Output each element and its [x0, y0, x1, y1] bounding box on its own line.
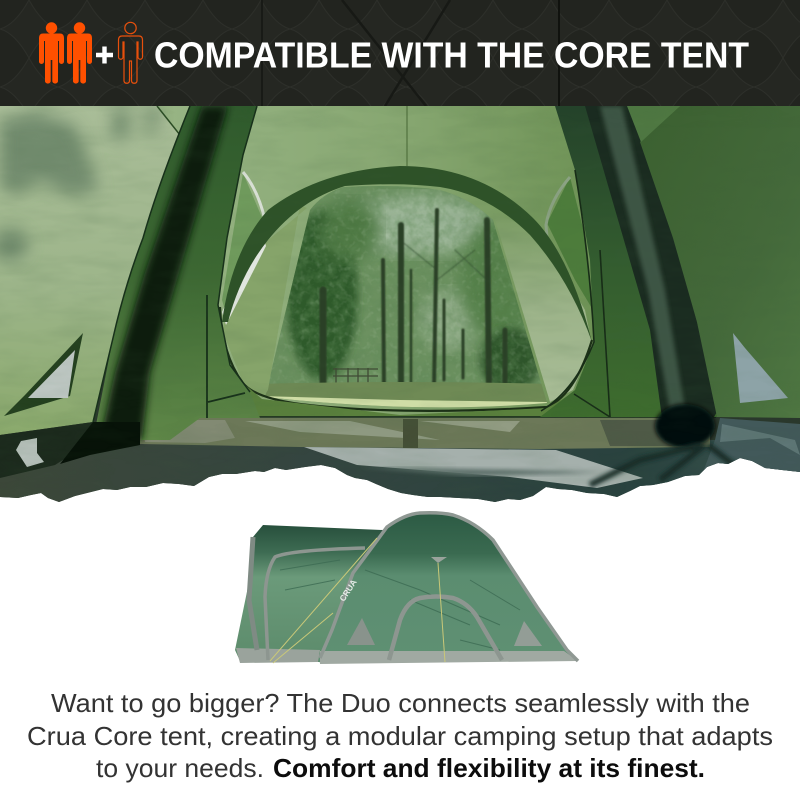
dome base strip	[320, 651, 578, 664]
dome tube outline	[320, 513, 578, 661]
right pole	[585, 106, 717, 448]
back wall bottom edge	[259, 416, 716, 418]
right triangular vent	[733, 333, 788, 403]
tree trunks	[323, 210, 505, 388]
rear left tube	[249, 537, 257, 650]
right seam lines	[541, 170, 610, 417]
top vent	[431, 557, 447, 563]
dark shaft of left pole	[100, 106, 228, 440]
lower right floor fabric	[704, 418, 800, 472]
side window left	[222, 172, 265, 320]
main dome	[318, 513, 578, 663]
floor	[0, 440, 798, 502]
right inner wall	[540, 106, 717, 417]
back wall of tent	[130, 106, 690, 426]
side window right	[546, 177, 593, 310]
left wall panel	[0, 106, 180, 435]
left pole panel	[93, 106, 260, 440]
left door flap	[222, 205, 307, 398]
icon: filled person 1	[39, 22, 64, 84]
door arch frame band	[222, 166, 592, 342]
photo: tent interior with torn lower edge	[0, 104, 800, 510]
left triangular vent	[4, 333, 83, 416]
right triangle vent	[514, 621, 542, 646]
forest view through the door	[266, 186, 547, 408]
icon: filled person 2	[67, 22, 92, 84]
dark lower left tent hem	[0, 422, 93, 478]
white tag on hem	[16, 438, 44, 467]
yellow guy lines	[270, 538, 445, 663]
body text	[27, 688, 773, 783]
line 3 lead-in: to your needs.	[96, 753, 264, 783]
upper corner panel	[627, 106, 680, 142]
rear tent section	[235, 525, 383, 662]
lower right light fold	[720, 424, 800, 455]
door arch tube	[389, 596, 502, 660]
left white window trim	[222, 244, 266, 325]
fabric wrinkle texture	[0, 106, 800, 506]
left pole outline	[93, 106, 257, 422]
icon: people, two filled plus one outlined	[39, 22, 142, 84]
ground and lawn	[266, 382, 546, 402]
lower door sill	[246, 386, 564, 416]
park fence	[333, 368, 378, 382]
dark floor creases	[590, 445, 740, 485]
door opening outline	[220, 307, 592, 411]
line 3 bold statement: Comfort and flexibility at its finest.	[273, 753, 705, 783]
icon: plus sign	[96, 46, 113, 64]
tree shadows on left wall	[0, 104, 157, 261]
right door flap	[500, 226, 592, 402]
line 2: Crua Core tent, creating a modular camping setup that adapts	[27, 721, 773, 751]
line 1: Want to go bigger? The Duo connects seamlessly with the	[51, 688, 750, 718]
inner wall strip	[140, 418, 710, 450]
right wall panel	[640, 106, 800, 418]
top seam	[406, 106, 408, 166]
rear arch tube	[265, 548, 365, 660]
left seam line	[157, 106, 180, 135]
header band: quilted dark fabric	[0, 0, 800, 106]
photo base	[0, 315, 800, 502]
dark pole base left	[60, 422, 140, 464]
fabric folds on dome	[280, 560, 520, 650]
icon: outlined person	[118, 22, 142, 83]
left vertical seam	[207, 295, 245, 418]
rear base strip	[236, 648, 320, 663]
brand mark on tent: CRUA	[337, 578, 359, 603]
left triangle vent	[347, 618, 375, 645]
title: COMPATIBLE WITH THE CORE TENT	[154, 34, 749, 76]
sunlit floor patch	[304, 447, 643, 488]
small tent product photo	[235, 513, 578, 664]
